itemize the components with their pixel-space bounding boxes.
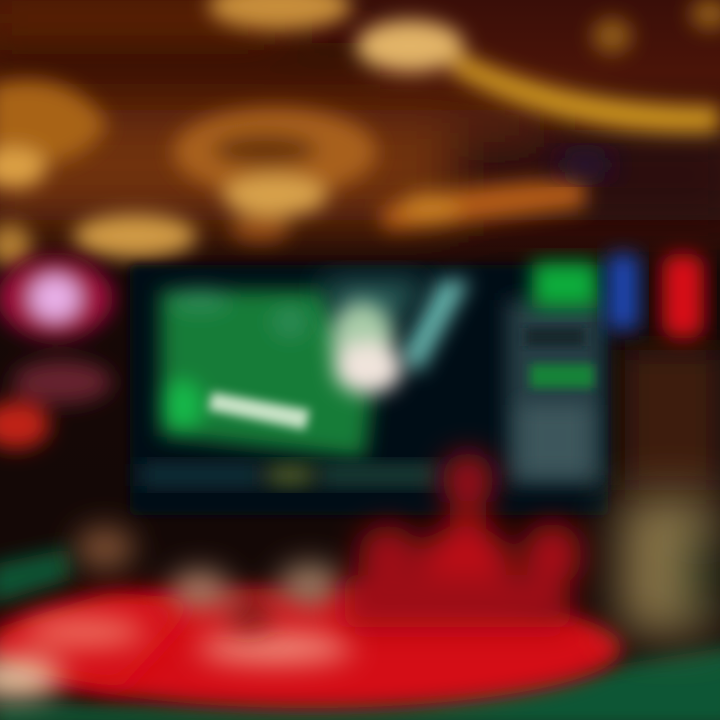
left neon sign	[0, 258, 113, 449]
bottom screen strip	[140, 464, 440, 486]
white cards	[330, 302, 402, 394]
purple ceiling glow	[555, 153, 615, 177]
red light	[662, 254, 704, 338]
table	[0, 548, 720, 720]
screen	[130, 262, 608, 515]
screen body	[130, 265, 608, 515]
white label bar	[208, 392, 310, 430]
red chip stacks	[345, 452, 582, 627]
chips and cards on the table	[75, 526, 342, 630]
sidebar grid	[520, 405, 590, 475]
red table top	[0, 588, 622, 708]
right sidebar panel	[506, 262, 604, 485]
pale table markings	[0, 618, 353, 698]
red table left reach	[0, 592, 200, 688]
ceiling: warm glow and lights	[0, 0, 720, 267]
green sidebar button	[532, 262, 598, 308]
blue light	[607, 254, 639, 330]
beige chip stacks at right	[620, 495, 720, 635]
green sidebar row	[530, 364, 594, 388]
teal accent stripe	[400, 280, 470, 372]
green game panel	[160, 288, 372, 458]
right wall warm shadow	[625, 350, 720, 490]
sidebar dark row	[525, 328, 585, 346]
green felt	[0, 548, 720, 720]
teal upper glow	[320, 280, 430, 330]
